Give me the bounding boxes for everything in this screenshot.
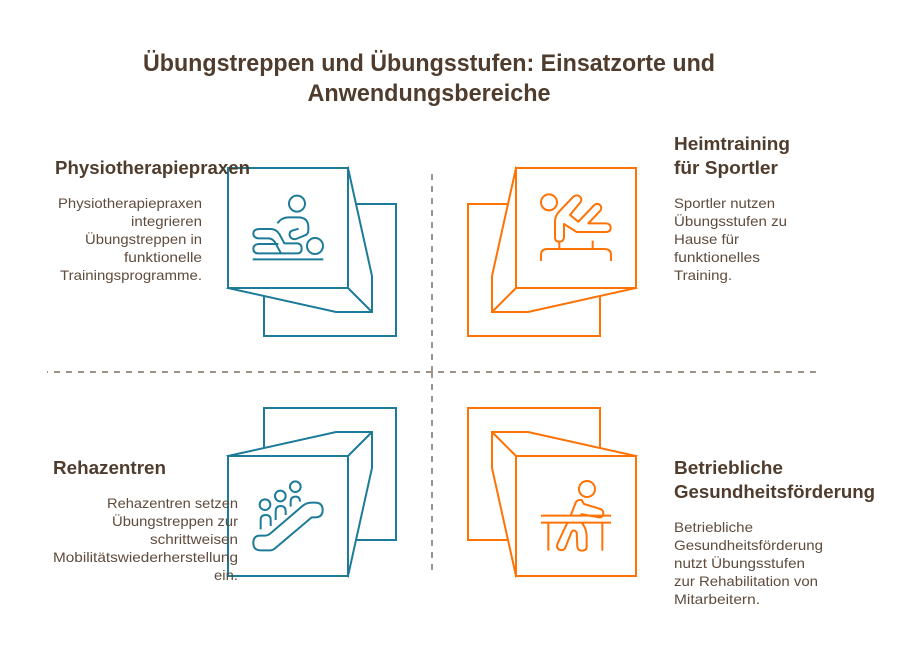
heading: Heimtraining für Sportler: Heimtraining (674, 134, 790, 154)
title (143, 50, 715, 107)
horizontal dashed axis (47, 371, 816, 373)
text block: Physiotherapiepraxen: integrieren (131, 213, 202, 229)
heading: Rehazentren: Rehazentren (53, 458, 166, 478)
heading: Betriebliche Gesundheitsförderung (674, 458, 875, 502)
panel: Rehazentren cube (228, 408, 396, 576)
text block: Betriebliche Gesundheitsförderung: Betriebliche (674, 519, 753, 535)
heading: Heimtraining für Sportler (674, 134, 790, 178)
text block: Heimtraining: Hause für (674, 231, 739, 247)
title: Anwendungsbereiche (308, 80, 550, 107)
text block: Rehazentren: Rehazentren setzen (107, 495, 238, 511)
text block: Heimtraining: Sportler nutzen (674, 195, 775, 211)
text block: Heimtraining: Übungsstufen zu (674, 212, 787, 229)
text block: Betriebliche Gesundheitsförderung: zur Rehabilitation von (674, 573, 818, 589)
vertical dashed axis (431, 174, 433, 570)
text block: Physiotherapiepraxen: Trainingsprogramme. (60, 267, 202, 283)
heading: Betriebliche Gesundheitsförderung: Betriebliche (674, 458, 783, 478)
text block: Heimtraining (674, 195, 787, 283)
text block: Betriebliche Gesundheitsförderung: Mitarbeitern. (674, 591, 760, 607)
title: Übungstreppen und Übungsstufen: Einsatzorte und (143, 50, 715, 77)
heading: Betriebliche Gesundheitsförderung: Gesundheitsförderung (674, 482, 875, 502)
icon: massage therapy (253, 196, 323, 259)
text block: Betriebliche Gesundheitsförderung (674, 519, 823, 607)
text block: Rehazentren (53, 495, 238, 583)
text block: Betriebliche Gesundheitsförderung: nutzt Übungsstufen (674, 554, 805, 571)
text block: Betriebliche Gesundheitsförderung: Gesundheitsförderung (674, 537, 823, 553)
panel: Heimtraining cube (468, 168, 636, 336)
icon: person at desk (541, 481, 611, 551)
text block: Heimtraining: Training. (674, 267, 732, 283)
text block: Heimtraining: funktionelles (674, 249, 760, 265)
heading: Physiotherapiepraxen: Physiotherapiepraxen (55, 158, 250, 178)
icon: gymnast on pommel horse (541, 194, 611, 261)
text block: Physiotherapiepraxen: Physiotherapiepraxen (58, 195, 202, 211)
text block: Rehazentren: schrittweisen (150, 531, 238, 547)
text block: Physiotherapiepraxen: funktionelle (124, 249, 202, 265)
text block: Rehazentren: ein. (214, 567, 238, 583)
text block: Physiotherapiepraxen (58, 195, 202, 283)
panel: Betriebliche Gesundheitsförderung cube (468, 408, 636, 576)
text block: Physiotherapiepraxen: Übungstreppen in (85, 230, 202, 247)
heading: Heimtraining für Sportler: für Sportler (674, 158, 778, 178)
text block: Rehazentren: Übungstreppen zur (112, 512, 238, 529)
panel: Physiotherapiepraxen cube (228, 168, 396, 336)
icon: people on escalator (253, 481, 323, 550)
text block: Rehazentren: Mobilitätswiederherstellung (53, 549, 238, 565)
